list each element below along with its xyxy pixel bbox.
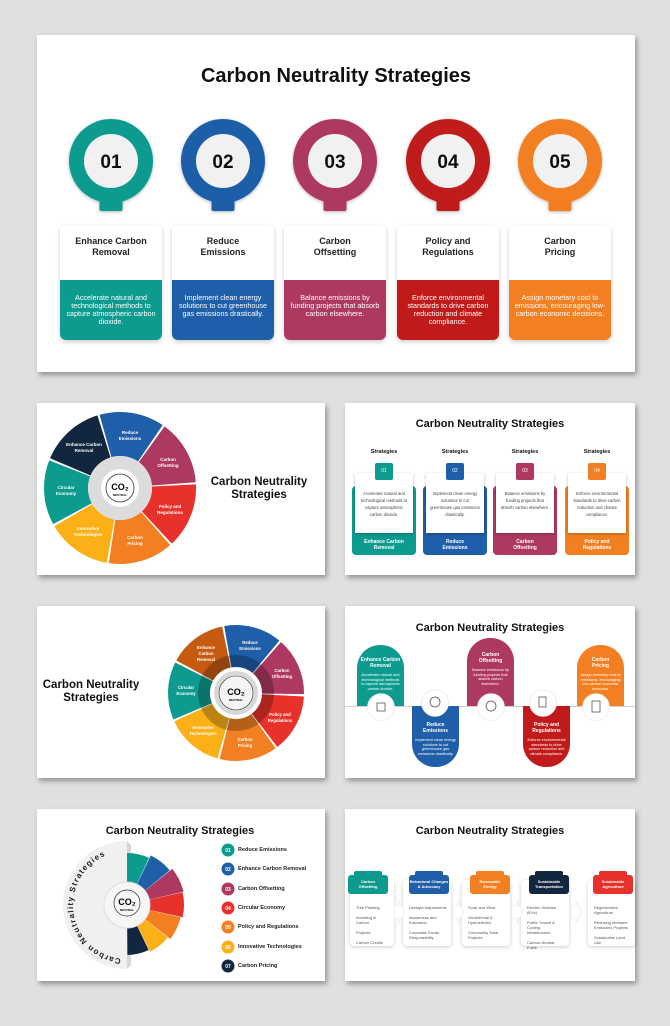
wheel chart: Regulations	[268, 718, 293, 723]
slide title: Strategies	[63, 692, 119, 704]
column: Sustainable Transportation: Transportation	[535, 884, 563, 889]
pill 3: Carbon	[482, 652, 499, 658]
pie chart: Enhance Carbon	[66, 442, 102, 447]
card 02	[172, 225, 274, 340]
pie chart: Reduce	[122, 430, 139, 435]
column: Sustainable Agriculture: Regenerative	[594, 905, 618, 910]
column 03: Carbon	[516, 539, 534, 545]
card 02: Implement clean energy solutions to cut greenhouse gas emissions drastically.	[179, 293, 267, 318]
wheel chart: Technologies	[189, 731, 217, 736]
legend list: Innovative Technologies	[238, 944, 302, 950]
half wheel chart: 02	[225, 867, 231, 873]
column: Carbon Offsetting: Projects	[356, 930, 370, 935]
column: Carbon Offsetting: Tree Planting	[356, 905, 380, 910]
column 04: Strategies	[584, 449, 610, 455]
column: Behavioral Changes: Responsibility	[409, 935, 434, 940]
panel: process flow slide	[345, 809, 635, 981]
column: Sustainable Agriculture: Sustainable Land	[594, 935, 625, 940]
column 03	[493, 449, 557, 555]
column 01: Enhance Carbon	[364, 539, 404, 545]
column: Sustainable Transportation: Carbon-Neutral	[527, 940, 554, 945]
panel: segmented wheel slide	[37, 606, 325, 778]
column: Renewable Energy: Projects	[468, 935, 482, 940]
column 03: Strategies	[512, 449, 538, 455]
pill 4	[523, 706, 570, 767]
column 01: Accelerate natural and technological methods to capture atmospheric carbon dioxide.	[361, 491, 407, 517]
wheel chart: Enhance	[197, 645, 216, 650]
panel: pie wheel slide	[37, 403, 325, 575]
column: Sustainable Agriculture: Use	[594, 940, 601, 945]
legend list: Circular Economy	[238, 905, 285, 911]
pie chart: Pricing	[127, 541, 143, 546]
panel: process flow slide: Fuels	[527, 945, 537, 950]
card 03: Offsetting	[314, 247, 356, 257]
slide title: Carbon Neutrality Strategies	[416, 622, 564, 634]
column 02: Emissions	[442, 545, 468, 551]
column 01: Removal	[374, 545, 394, 551]
column 04: Regulations	[583, 545, 611, 551]
slide title: Strategies	[231, 489, 287, 501]
column: Sustainable Transportation: Public Transit &	[527, 920, 555, 925]
column: Carbon Offsetting	[348, 871, 396, 949]
pie chart: Carbon	[127, 535, 143, 540]
card 02: Emissions	[200, 247, 246, 257]
column: Behavioral Changes: Lifestyle Adjustments	[409, 905, 447, 910]
wheel chart: CO₂	[227, 687, 245, 697]
card 01: Removal	[92, 247, 130, 257]
pie chart: NEUTRAL	[113, 493, 127, 497]
column 02	[423, 449, 487, 555]
pie chart: Offsetting	[157, 463, 179, 468]
pill 4: Policy and	[534, 722, 559, 728]
slide title: Carbon Neutrality	[43, 679, 139, 691]
column: Renewable Energy: Community Solar	[468, 930, 499, 935]
column: Sustainable Transportation: Sustainable	[538, 879, 560, 884]
column: Renewable Energy: Hydroelectric	[468, 920, 491, 925]
column 04	[565, 449, 629, 555]
card 01: Accelerate natural and technological methods to capture atmospheric carbon dioxide.	[66, 293, 156, 326]
pill 3: Offsetting	[479, 658, 502, 664]
legend list: Reduce Emissions	[238, 847, 287, 853]
column 02: 02	[452, 468, 458, 474]
column 04: Enforce environmental standards to drive carbon reduction and climate compliance.	[573, 491, 621, 517]
slide title	[211, 476, 308, 501]
pill 4: Enforce environmental standards to drive carbon reduction and climate compliance.	[528, 738, 566, 756]
panel: main slide	[37, 35, 635, 372]
column: Renewable Energy: Geothermal &	[468, 915, 493, 920]
column: Sustainable Transportation: Cycling	[527, 925, 540, 930]
panel: wave timeline slide	[345, 606, 635, 778]
card 03: Balance emissions by funding projects that absorb carbon elsewhere.	[291, 293, 379, 318]
pill 5: Carbon	[592, 657, 609, 663]
pill 5: Pricing	[592, 663, 609, 669]
card 04: Enforce environmental standards to drive carbon reduction and climate compliance.	[407, 293, 489, 326]
wheel chart: Carbon	[274, 668, 290, 673]
icons on line	[367, 689, 610, 721]
title: Carbon Neutrality Strategies	[201, 65, 471, 87]
panel: half wheel list slide	[37, 809, 325, 981]
column 01: Strategies	[371, 449, 397, 455]
half wheel chart: 05	[225, 925, 231, 931]
marker 05: 05	[549, 152, 571, 173]
pie chart: Technologies	[74, 532, 103, 537]
column 02: Reduce	[446, 539, 464, 545]
pie chart: Circular	[57, 485, 75, 490]
column: Renewable Energy: Renewable	[480, 879, 500, 884]
legend list: Policy and Regulations	[238, 924, 299, 930]
column: Carbon Offsetting: Carbon Credits	[356, 940, 383, 945]
card 02: Reduce	[207, 236, 239, 246]
wheel chart: Offsetting	[272, 674, 293, 679]
card 04: Regulations	[422, 247, 474, 257]
wheel chart: Carbon	[237, 737, 253, 742]
pie chart: Carbon	[160, 457, 176, 462]
marker 01	[69, 119, 153, 211]
column 03: 03	[522, 468, 528, 474]
slide title: Carbon Neutrality Strategies	[106, 825, 254, 837]
marker 05	[518, 119, 602, 211]
card 05: Assign monetary cost to emissions, encouraging low-carbon economic decisions.	[515, 293, 605, 318]
pill 1: Enhance Carbon	[361, 657, 400, 663]
wheel chart: NEUTRAL	[229, 698, 243, 702]
wheel chart: Economy	[176, 691, 196, 696]
half wheel chart: 07	[225, 964, 231, 970]
numbered ring markers	[67, 118, 604, 214]
pie chart: Removal	[75, 448, 93, 453]
pill 4: Regulations	[532, 728, 561, 734]
column: Sustainable Agriculture: Reducing Methane	[594, 920, 628, 925]
wheel chart: Circular	[178, 685, 194, 690]
arrows	[394, 901, 582, 923]
column 01	[352, 449, 416, 555]
pill 2	[412, 706, 459, 767]
column: Sustainable Transportation: Electric Vehicles	[527, 905, 556, 910]
slide title: Carbon Neutrality Strategies	[416, 825, 564, 837]
legend list: Carbon Pricing	[238, 963, 277, 969]
half wheel chart: 06	[225, 945, 231, 951]
card 05	[509, 225, 611, 340]
pie chart: CO₂	[111, 482, 129, 492]
legend list: Enhance Carbon Removal	[238, 866, 306, 872]
pill 5	[577, 645, 624, 706]
card 05: Pricing	[545, 247, 575, 257]
half wheel chart: NEUTRAL	[120, 908, 134, 912]
pie chart	[44, 412, 196, 564]
pill 3	[467, 638, 514, 706]
pie chart: Economy	[56, 491, 77, 496]
marker 03: 03	[324, 152, 346, 173]
panel: strategies columns slide	[345, 403, 635, 575]
pie chart: Innovative	[77, 526, 100, 531]
half wheel chart: Carbon Neutrality Strategies	[67, 852, 120, 964]
pie chart: Emissions	[119, 436, 142, 441]
legend list: Carbon Offsetting	[238, 886, 285, 892]
wheel chart: Policy and	[269, 712, 291, 717]
wheel chart: Pricing	[238, 743, 253, 748]
half wheel chart: 04	[225, 906, 231, 912]
slide title: Carbon Neutrality Strategies	[416, 418, 564, 430]
column: Carbon Offsetting: Offsetting	[359, 884, 377, 889]
column 04: 04	[594, 468, 600, 474]
pill 2: Reduce	[426, 722, 445, 728]
column 01: 01	[381, 468, 387, 474]
column: Behavioral Changes: Education	[409, 920, 427, 925]
column: Sustainable Transportation: (EVs)	[527, 910, 537, 915]
card 05: Carbon	[544, 236, 576, 246]
marker 02	[181, 119, 265, 211]
wheel chart: Removal	[197, 657, 215, 662]
column 03: Balance emissions by funding projects that absorb carbon elsewhere.	[501, 491, 549, 510]
wheel chart: Carbon	[198, 651, 214, 656]
half wheel chart: CO₂	[118, 897, 136, 907]
column: Carbon Offsetting: Carbon	[361, 879, 375, 884]
pill 1: Removal	[370, 663, 391, 669]
wheel chart: Emissions	[239, 646, 261, 651]
slide title	[43, 679, 140, 704]
marker 01: 01	[100, 152, 122, 173]
pill 2: Implement clean energy solutions to cut greenhouse gas emissions drastically.	[415, 738, 456, 756]
pill 3: Balance emissions by funding projects that absorb carbon elsewhere.	[472, 668, 509, 686]
card 04: Policy and	[425, 236, 470, 246]
column: Behavioral Changes: Awareness and	[409, 915, 436, 920]
wheel chart	[168, 625, 304, 761]
card 03: Carbon	[319, 236, 351, 246]
column: Sustainable Agriculture: Emissions Projects	[594, 925, 628, 930]
column: Behavioral Changes: Corporate Social	[409, 930, 439, 935]
pie chart: Regulations	[157, 510, 183, 515]
pill 1: Accelerate natural and technological methods to capture atmospheric carbon dioxide.	[361, 673, 400, 691]
column: Behavioral Changes	[401, 871, 453, 949]
half wheel chart	[63, 841, 234, 972]
column: Sustainable Transportation: Infrastructure	[527, 930, 551, 935]
column: Renewable Energy: Energy	[483, 884, 497, 889]
column: Carbon Offsetting: Investing in	[356, 915, 376, 920]
column: Sustainable Transportation	[519, 871, 571, 950]
column: Renewable Energy: Solar and Wind	[468, 905, 495, 910]
card 03	[284, 225, 386, 340]
card 04	[397, 225, 499, 340]
half wheel chart: 03	[225, 887, 231, 893]
pill 2: Emissions	[423, 728, 448, 734]
card 01: Enhance Carbon	[75, 236, 147, 246]
marker 02: 02	[212, 152, 234, 173]
pill 1	[357, 645, 404, 706]
column 04: Policy and	[584, 539, 610, 545]
marker 03	[293, 119, 377, 211]
wheel chart: Reduce	[242, 640, 258, 645]
wheel chart: Innovative	[192, 725, 214, 730]
column 02: Strategies	[442, 449, 468, 455]
pill 5: Assign monetary cost to emissions, encouraging low-carbon economic decisions.	[580, 673, 621, 691]
slide title: Carbon Neutrality	[211, 476, 307, 488]
column 03: Offsetting	[513, 545, 537, 551]
column: Sustainable Agriculture: Sustainable	[602, 879, 624, 884]
pie chart: Policy and	[159, 504, 182, 509]
column: Behavioral Changes: & Advocacy	[418, 884, 440, 889]
column: Sustainable Agriculture	[586, 871, 636, 949]
card 01	[60, 225, 162, 340]
column: Carbon Offsetting: Carbon	[356, 920, 369, 925]
legend list	[238, 847, 306, 969]
column: Sustainable Agriculture: Agriculture	[602, 884, 624, 889]
column: Renewable Energy	[460, 871, 512, 949]
marker 04	[406, 119, 490, 211]
marker 04: 04	[437, 152, 459, 173]
column: Sustainable Agriculture: Agriculture	[594, 910, 613, 915]
column 02: Implement clean energy solutions to cut greenhouse gas emissions drastically.	[430, 491, 480, 517]
column: Behavioral Changes: Behavioral Changes	[410, 879, 448, 884]
half wheel chart: 01	[225, 848, 231, 854]
